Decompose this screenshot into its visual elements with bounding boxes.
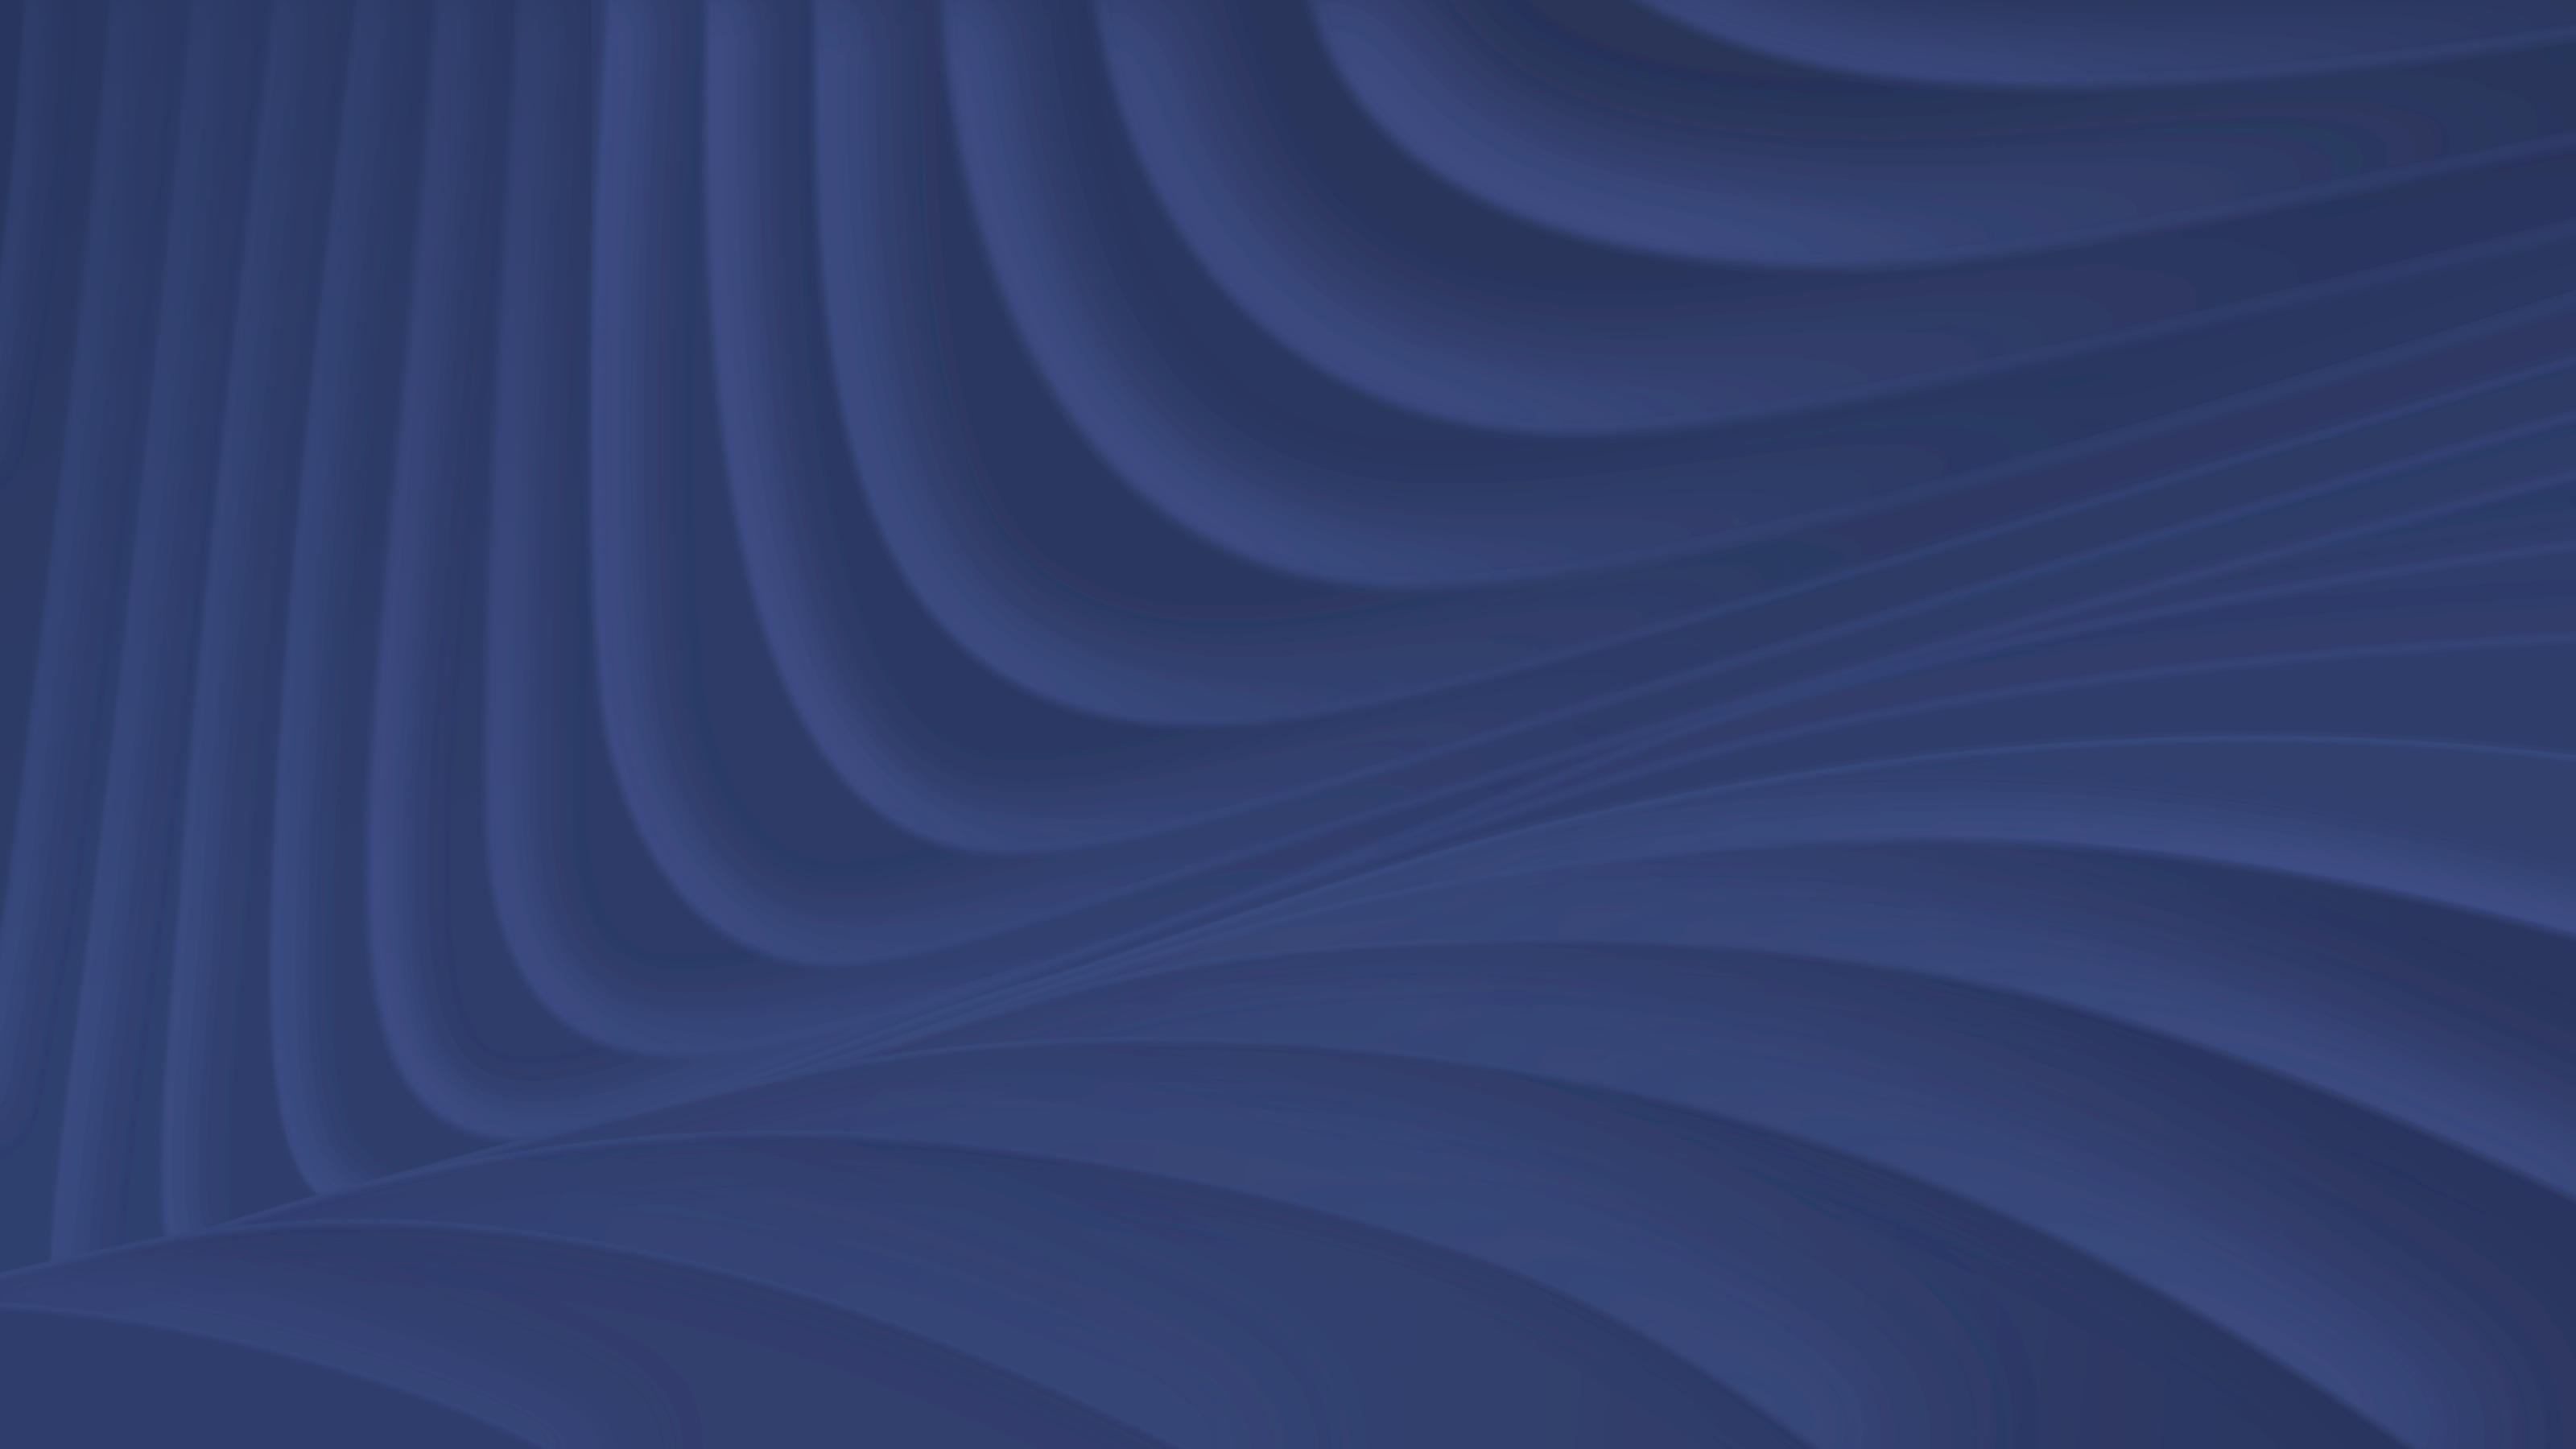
vertical fold 3 <box>0 0 194 1449</box>
arc fold I <box>0 1037 2576 1449</box>
vertical fold 1 <box>0 0 493 1449</box>
arc fold F <box>0 736 2576 1449</box>
vertical fold 4 <box>0 0 112 1449</box>
fold 2 <box>1096 0 2191 433</box>
vertical fold 5 <box>0 0 25 460</box>
top left shading <box>0 0 592 985</box>
arc fold G <box>0 836 2576 1449</box>
fold 1 <box>1312 0 2436 266</box>
vertical fold 2 <box>0 0 276 1449</box>
arc fold K <box>0 1219 2576 1449</box>
arc fold bottom left <box>0 1301 608 1449</box>
arc fold H <box>0 936 2576 1449</box>
arc fold J <box>0 1130 2576 1449</box>
